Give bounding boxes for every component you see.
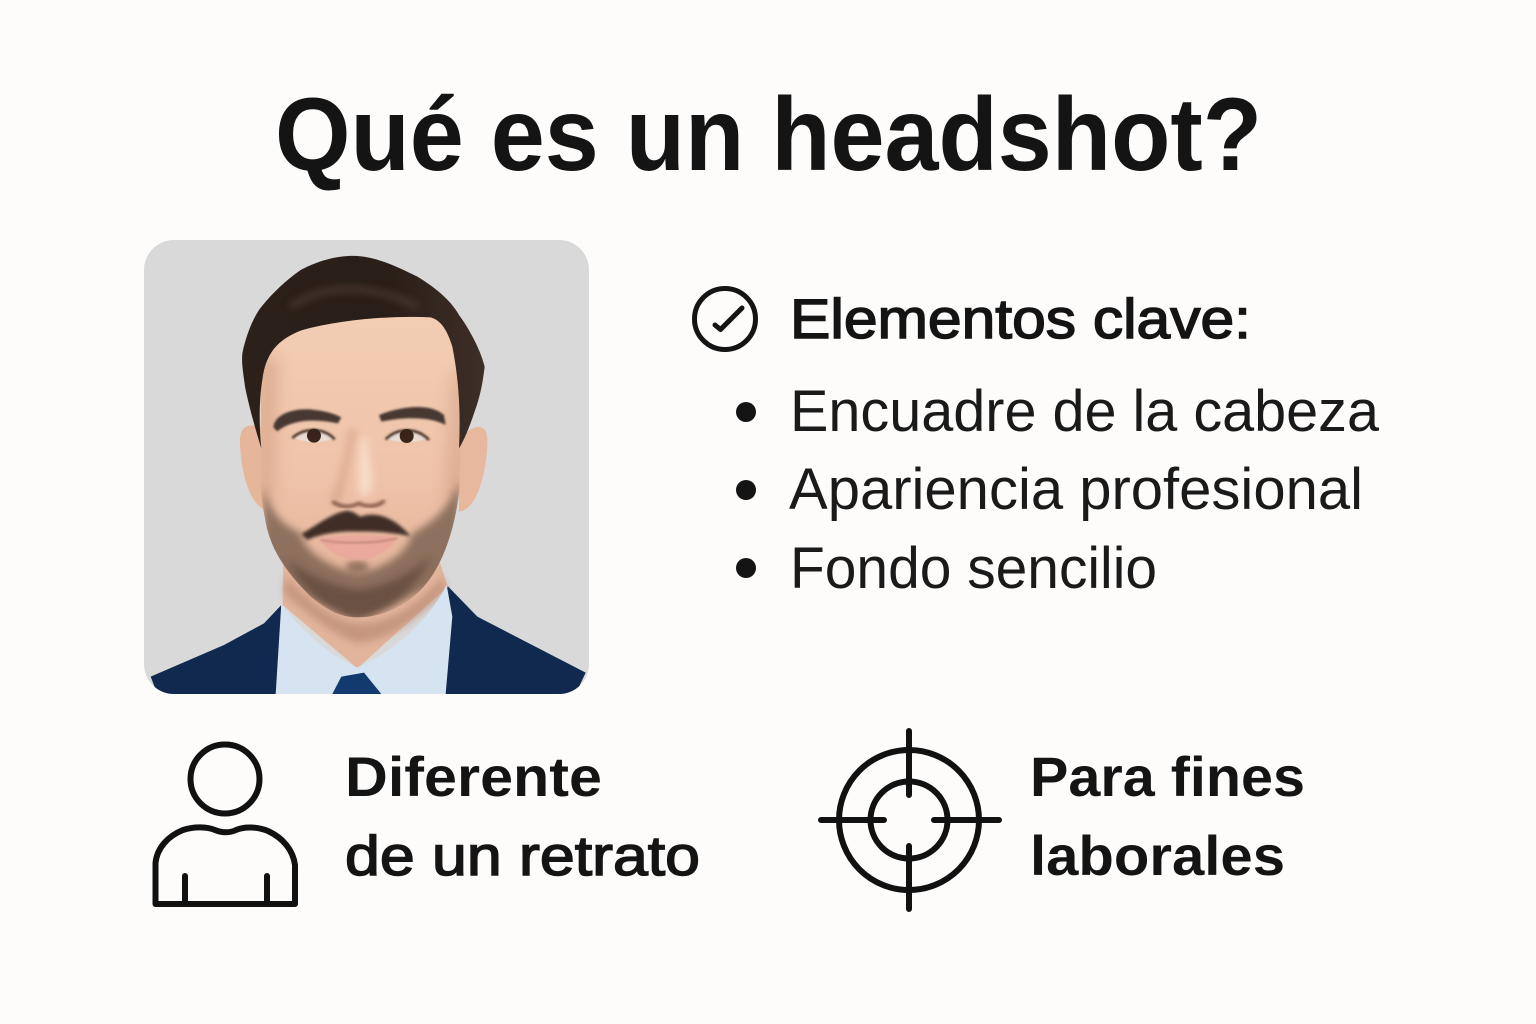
icon: person (156, 744, 295, 904)
tie (332, 673, 381, 694)
soul patch (346, 561, 369, 573)
lips (319, 535, 399, 560)
list: key elements: Fondo sencilio (790, 536, 1157, 601)
label: different from a portrait: de un retrato (345, 824, 700, 887)
left ear (240, 426, 263, 509)
label: for work purposes: laborales (1030, 824, 1285, 887)
nose (329, 427, 385, 507)
right eye (386, 429, 429, 443)
right ear (459, 427, 487, 512)
list: key elements: Encuadre de la cabeza (790, 379, 1380, 444)
label: for work purposes (1030, 745, 1305, 887)
mustache (301, 511, 411, 540)
title: Qué es un headshot? (275, 77, 1262, 193)
hair (242, 256, 485, 448)
shirt collar (276, 585, 452, 694)
jacket (151, 585, 586, 694)
beard (263, 480, 460, 623)
face side shading (257, 357, 467, 507)
label: different from a portrait: Diferente (345, 745, 602, 808)
label: different from a portrait (345, 745, 700, 887)
list: key elements: Apariencia profesional (789, 457, 1363, 522)
icon: check circle (694, 288, 756, 350)
heading: key elements: Elementos clave: (790, 287, 1251, 350)
label: for work purposes: Para fines (1030, 745, 1305, 808)
neck shadow (284, 577, 446, 643)
icon: target (821, 731, 999, 909)
chin stubble (287, 557, 431, 617)
left eyebrow (273, 409, 341, 431)
hair highlight (291, 289, 417, 307)
photo: professional headshot of a man (144, 240, 589, 694)
list: key elements (736, 379, 1380, 601)
right eyebrow (379, 407, 446, 425)
neck (283, 560, 448, 668)
face (254, 307, 467, 623)
left eye (292, 429, 335, 443)
